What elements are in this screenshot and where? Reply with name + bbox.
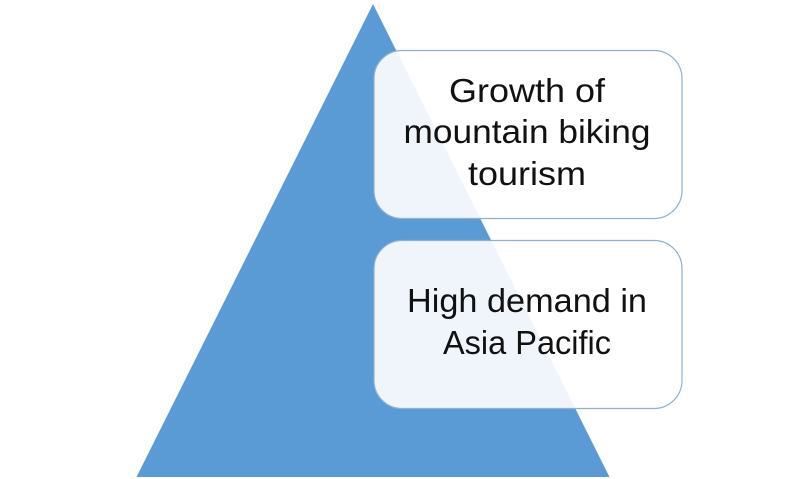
pyramid triangle — [136, 4, 610, 477]
card: high demand in Asia Pacific: Asia Pacific — [443, 324, 611, 361]
card: growth of mountain biking tourism: tourism — [468, 155, 586, 192]
card: high demand in Asia Pacific — [374, 240, 682, 408]
card: growth of mountain biking tourism: Growth of — [449, 72, 606, 109]
card: high demand in Asia Pacific: High demand in — [407, 282, 647, 319]
card: growth of mountain biking tourism — [374, 50, 682, 218]
card: growth of mountain biking tourism: mountain biking — [404, 113, 650, 150]
